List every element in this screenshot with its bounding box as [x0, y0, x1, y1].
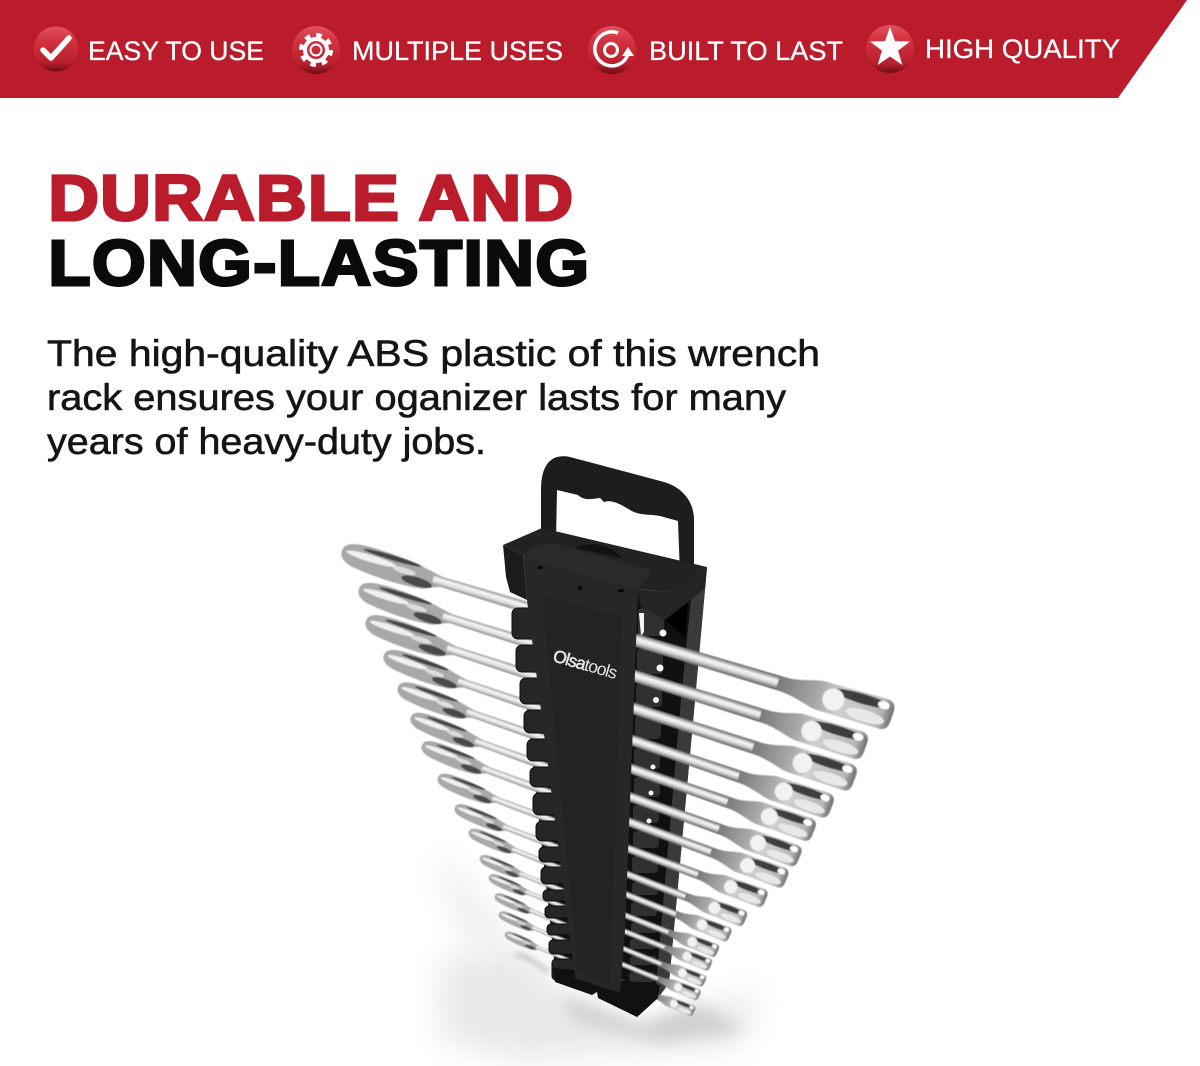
- rack left teeth: [512, 608, 578, 980]
- icon: refresh gear: [588, 26, 636, 74]
- label: high quality: HIGH QUALITY: [925, 34, 1120, 64]
- banner shape: [0, 0, 1187, 98]
- icon: check mark: [34, 26, 78, 72]
- body text: The high-quality ABS plastic of this wrench: [47, 333, 820, 374]
- body text: rack ensures your oganizer lasts for many: [47, 377, 787, 418]
- header banner: [0, 0, 1187, 98]
- rack front panel: [523, 555, 638, 992]
- brand logo: Olsatools: [551, 646, 620, 683]
- label: multiple uses: MULTIPLE USES: [352, 36, 563, 66]
- heading: [48, 162, 590, 299]
- panel recess: [542, 595, 622, 985]
- rack handle: [541, 456, 694, 590]
- floor shadow: [435, 860, 760, 1060]
- body text: [47, 333, 820, 462]
- wrench rack: [337, 456, 897, 1017]
- rack rear spine: [620, 567, 707, 1017]
- icon: star: [866, 25, 914, 73]
- heading line 1: DURABLE AND: [48, 162, 574, 234]
- icon: gear: [292, 26, 340, 74]
- label: easy to use: EASY TO USE: [88, 36, 264, 66]
- label: built to last: BUILT TO LAST: [649, 36, 843, 66]
- wrench set: [337, 537, 897, 1017]
- rack top block: [503, 528, 707, 620]
- mounting holes: [538, 566, 624, 592]
- heading line 2: LONG-LASTING: [48, 227, 590, 299]
- left backing column: [516, 607, 578, 968]
- body text: years of heavy-duty jobs.: [47, 421, 486, 462]
- rack base: [553, 968, 660, 1017]
